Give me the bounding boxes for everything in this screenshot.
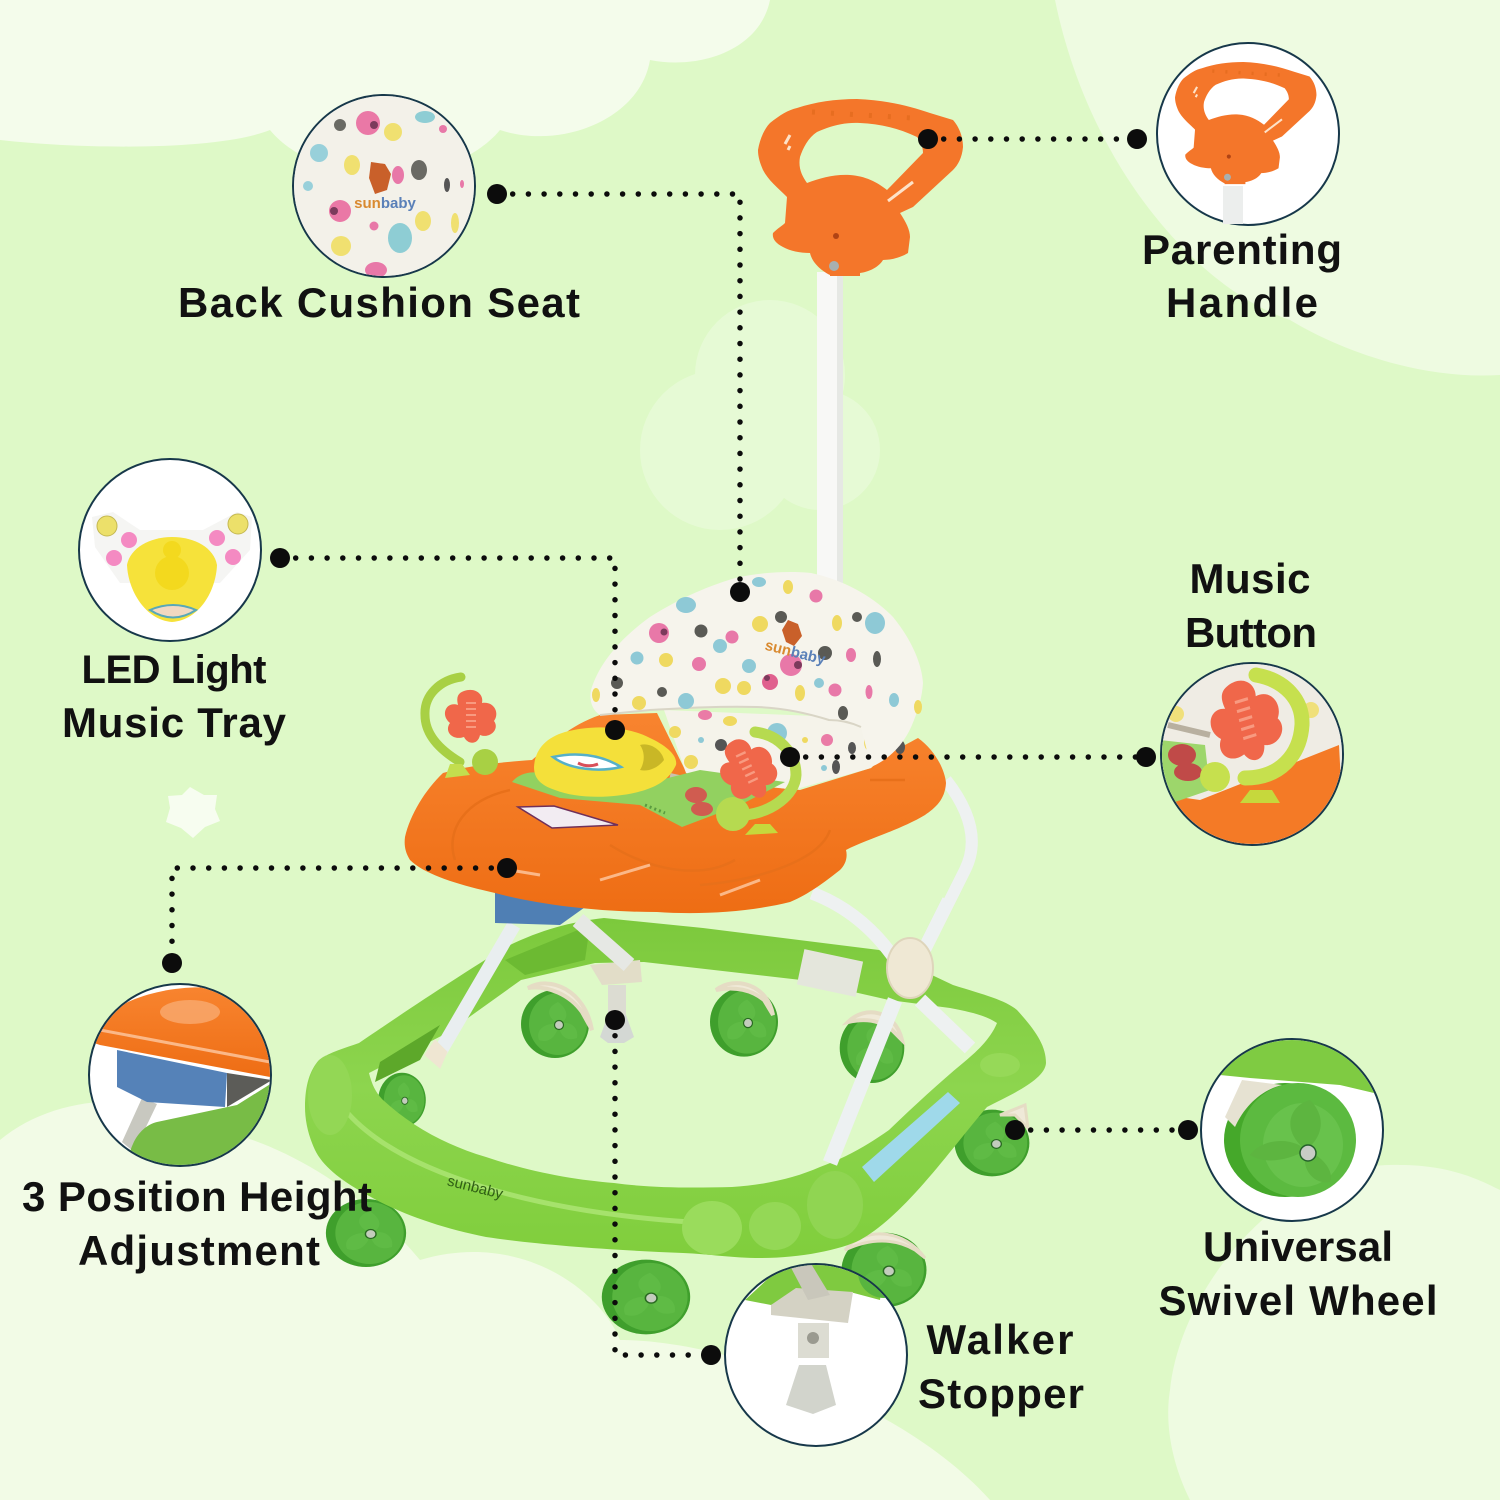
label: swivel wheel: Universal [1203, 1223, 1393, 1270]
parenting handle [758, 99, 963, 276]
green tray insert [512, 770, 785, 827]
label: parenting handle: Handle [1166, 279, 1318, 326]
height adjuster [495, 885, 588, 925]
label: walker stopper: Stopper [918, 1370, 1084, 1417]
inset: stopper [725, 1246, 910, 1446]
walker stopper [590, 960, 642, 1043]
label: parenting handle [1142, 226, 1342, 326]
frame legs [425, 780, 972, 1163]
label: walker stopper [918, 1316, 1084, 1417]
label: swivel wheel: Swivel Wheel [1158, 1277, 1438, 1324]
front wheels [326, 1105, 1029, 1334]
label: parenting handle: Parenting [1142, 226, 1342, 273]
rear wheels [378, 983, 904, 1127]
callout: walker stopper [605, 1010, 1084, 1446]
inset: back cushion: sunbaby [354, 195, 416, 212]
steering wheel [534, 727, 676, 797]
label: LED light music tray [62, 648, 287, 746]
inset: tray [79, 459, 261, 641]
callout: swivel wheel [1005, 1039, 1438, 1324]
label: swivel wheel [1158, 1223, 1438, 1324]
callout: music button [780, 555, 1345, 860]
parenting pole [817, 272, 843, 597]
label: height adjustment: Adjustment [78, 1227, 320, 1274]
inset: handle [1157, 43, 1339, 225]
hinge [887, 938, 933, 998]
label: music button: Button [1185, 609, 1317, 656]
walker product [305, 99, 1046, 1334]
inset: back cushion [290, 90, 480, 280]
callout: height adjustment [22, 858, 517, 1274]
leader [918, 129, 1147, 149]
inset: music button [1160, 660, 1345, 860]
inset: wheel [1200, 1039, 1385, 1221]
ring highlights and bumps [308, 925, 1020, 1255]
label: LED light music tray: Music Tray [62, 699, 287, 746]
callout: back cushion seat [178, 90, 580, 326]
leader: LED light music tray [270, 548, 625, 740]
leader [780, 747, 1156, 767]
label: walker stopper: Walker [926, 1316, 1074, 1363]
leader [162, 858, 517, 973]
leader: back cushion seat [487, 184, 750, 602]
label: LED light music tray: LED Light [82, 648, 266, 692]
label: height adjustment: 3 Position Height [22, 1173, 372, 1220]
warning label [797, 949, 863, 997]
callout: LED light music tray [62, 459, 287, 746]
sticker on base [862, 1092, 960, 1182]
leader [605, 1010, 721, 1365]
right toy [709, 729, 796, 835]
label: back cushion seat: Back Cushion Seat [178, 279, 580, 326]
base ring [305, 918, 1046, 1258]
sunbaby base logo: sunbaby [446, 1173, 505, 1203]
leader [1005, 1120, 1198, 1140]
seat back cushion: sunbaby [763, 637, 828, 669]
seat back cushion [590, 572, 923, 767]
orange tray [405, 713, 946, 913]
callout: parenting handle [918, 43, 1342, 326]
seat pad [664, 710, 914, 790]
label: music button: Music [1190, 555, 1310, 602]
label: height adjustment [22, 1173, 372, 1274]
label: music button [1185, 555, 1317, 656]
left toy [425, 677, 498, 778]
inset: height [85, 984, 275, 1170]
